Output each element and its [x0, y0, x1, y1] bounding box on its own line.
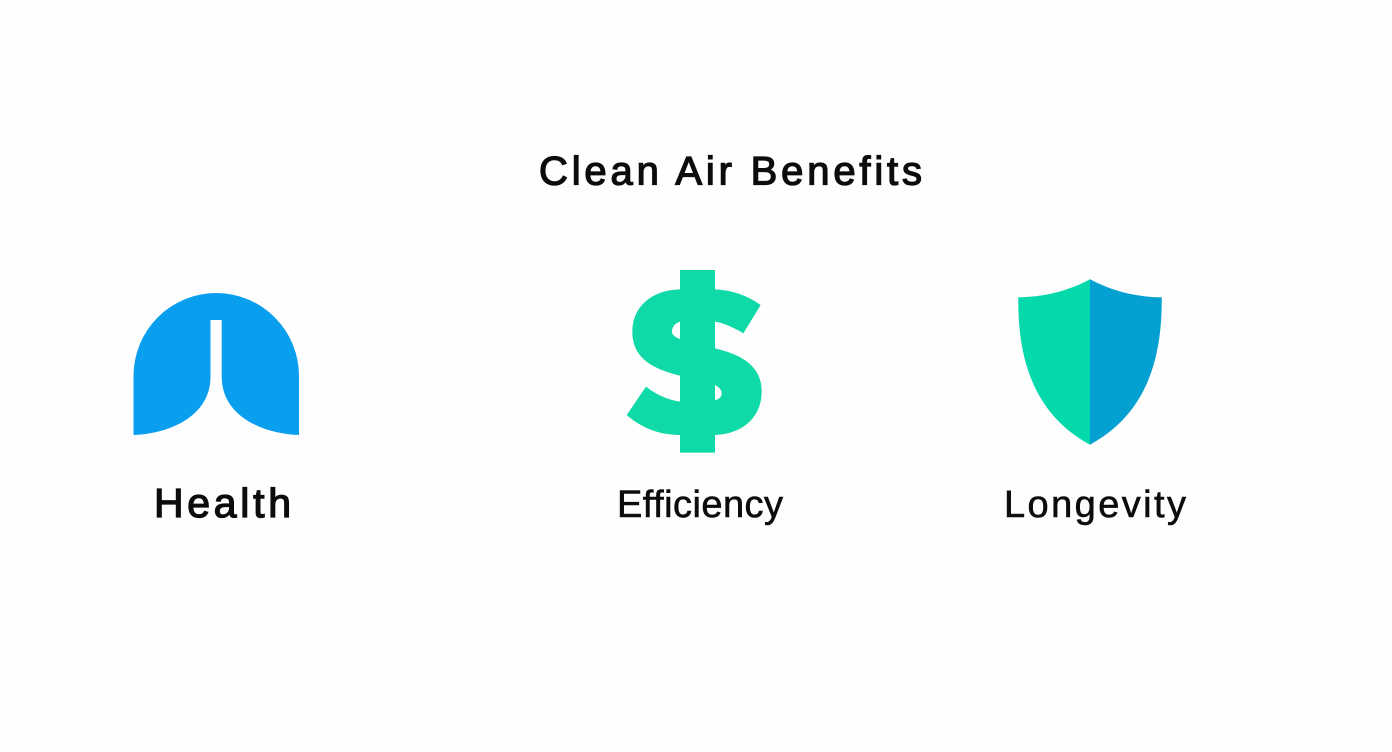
panel: longevity [1004, 279, 1186, 526]
icon: lungs [134, 293, 299, 435]
panel: efficiency [617, 270, 783, 526]
panel: health [134, 293, 299, 526]
label: health: Health [154, 480, 291, 526]
label: efficiency: Efficiency [617, 484, 783, 526]
icon: shield [1018, 279, 1162, 445]
label: longevity: Longevity [1004, 484, 1186, 526]
icon: dollar sign [627, 270, 762, 453]
title: Clean Air Benefits [539, 150, 922, 194]
